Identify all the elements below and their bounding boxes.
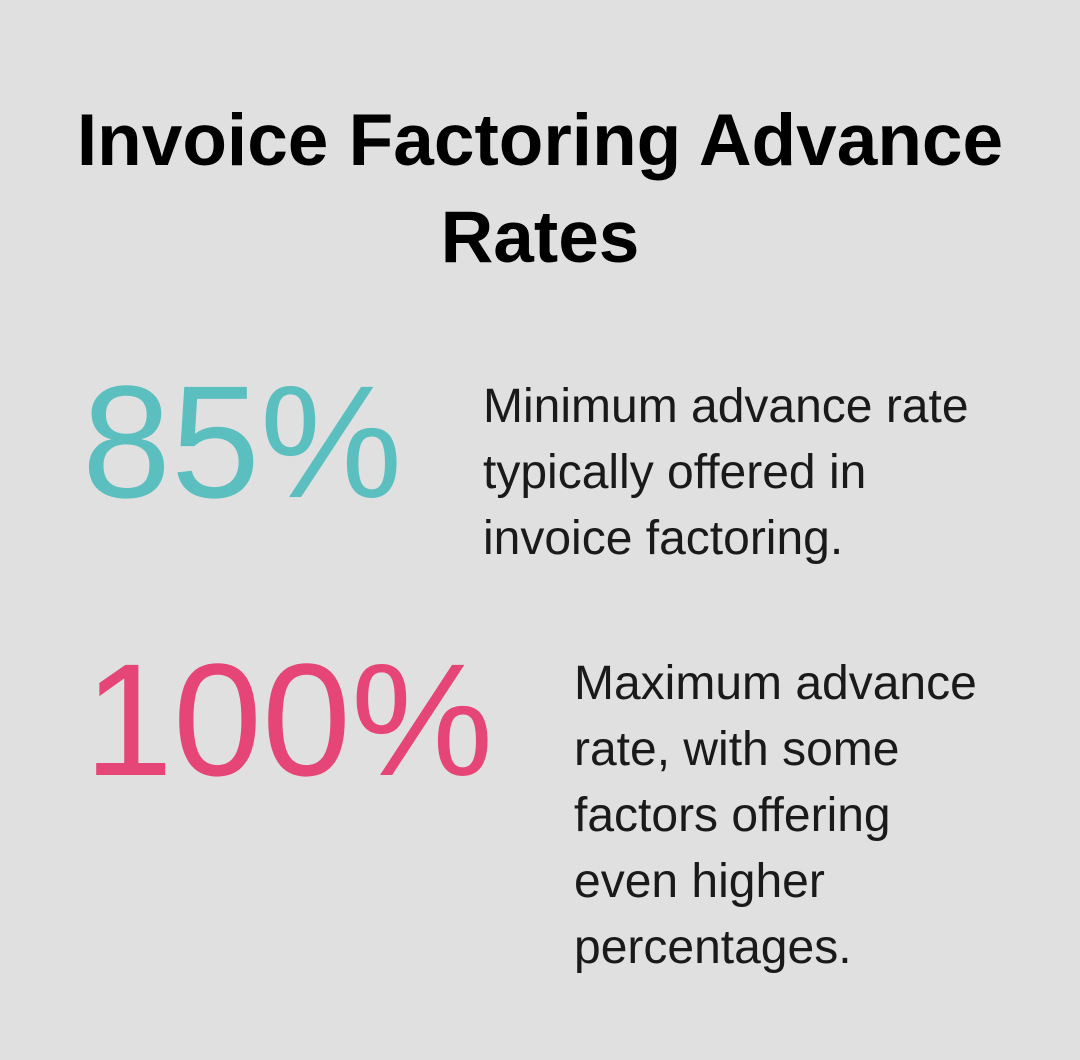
title [77,100,1003,278]
description: 85%: Minimum advance rate [483,380,969,433]
description: 100%: Maximum advance [574,657,977,710]
description: 100%: even higher [574,855,825,908]
description: 100%: factors offering [574,789,891,842]
description: 100% [574,657,977,974]
stat: 85%: 85% [82,352,402,531]
description: 100%: rate, with some [574,723,899,776]
description: 85% [483,380,969,565]
description: 100%: percentages. [574,921,852,974]
title: Invoice Factoring Advance [77,100,1003,181]
title: Rates [441,197,639,278]
description: 85%: invoice factoring. [483,512,843,565]
stat: 100%: 100% [84,630,493,809]
description: 85%: typically offered in [483,446,866,499]
